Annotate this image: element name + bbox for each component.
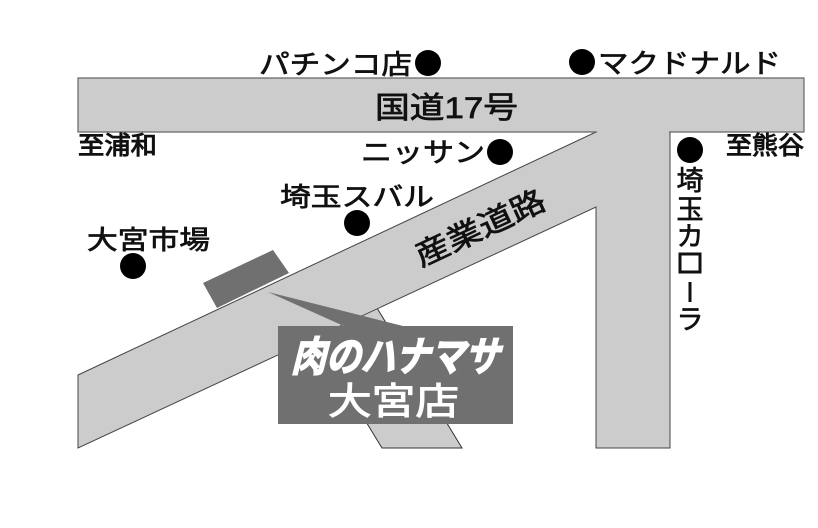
landmark: Saitama Corolla: ラ: [676, 305, 704, 335]
landmark: Saitama Subaru: [280, 182, 434, 236]
label: to Kumagaya: 至熊谷: [726, 132, 804, 160]
landmark: Saitama Corolla: [676, 137, 704, 335]
label: industrial road: 産業道路: [410, 184, 551, 273]
landmark: Saitama Subaru: 埼玉スバル: [280, 182, 434, 212]
road junction fill: [597, 131, 669, 215]
label: to Urawa: 至浦和: [78, 132, 157, 160]
landmark: Omiya market: 大宮市場: [87, 225, 210, 255]
landmark: Omiya market: [87, 225, 210, 279]
store label box: [278, 326, 513, 424]
label: route 17: 国道17号: [375, 92, 518, 125]
landmark: McDonald's: マクドナルド: [598, 49, 781, 79]
branch name: 大宮店: [328, 381, 459, 422]
landmark: pachinko: パチンコ店: [259, 50, 412, 80]
road: side street below the store label: [310, 308, 462, 448]
landmark: Saitama Corolla: 玉: [676, 195, 704, 225]
store logo: 肉のハナマサ: [289, 334, 508, 380]
road: diagonal industrial road and vertical road: [78, 132, 670, 448]
store building: [203, 250, 289, 308]
road: national route 17: [78, 78, 804, 132]
callout pointer: [268, 292, 407, 327]
landmark: Nissan: ニッサン: [361, 138, 485, 168]
landmark: Saitama Corolla: 埼: [676, 166, 704, 196]
landmark: Saitama Corolla: カ: [676, 222, 704, 252]
